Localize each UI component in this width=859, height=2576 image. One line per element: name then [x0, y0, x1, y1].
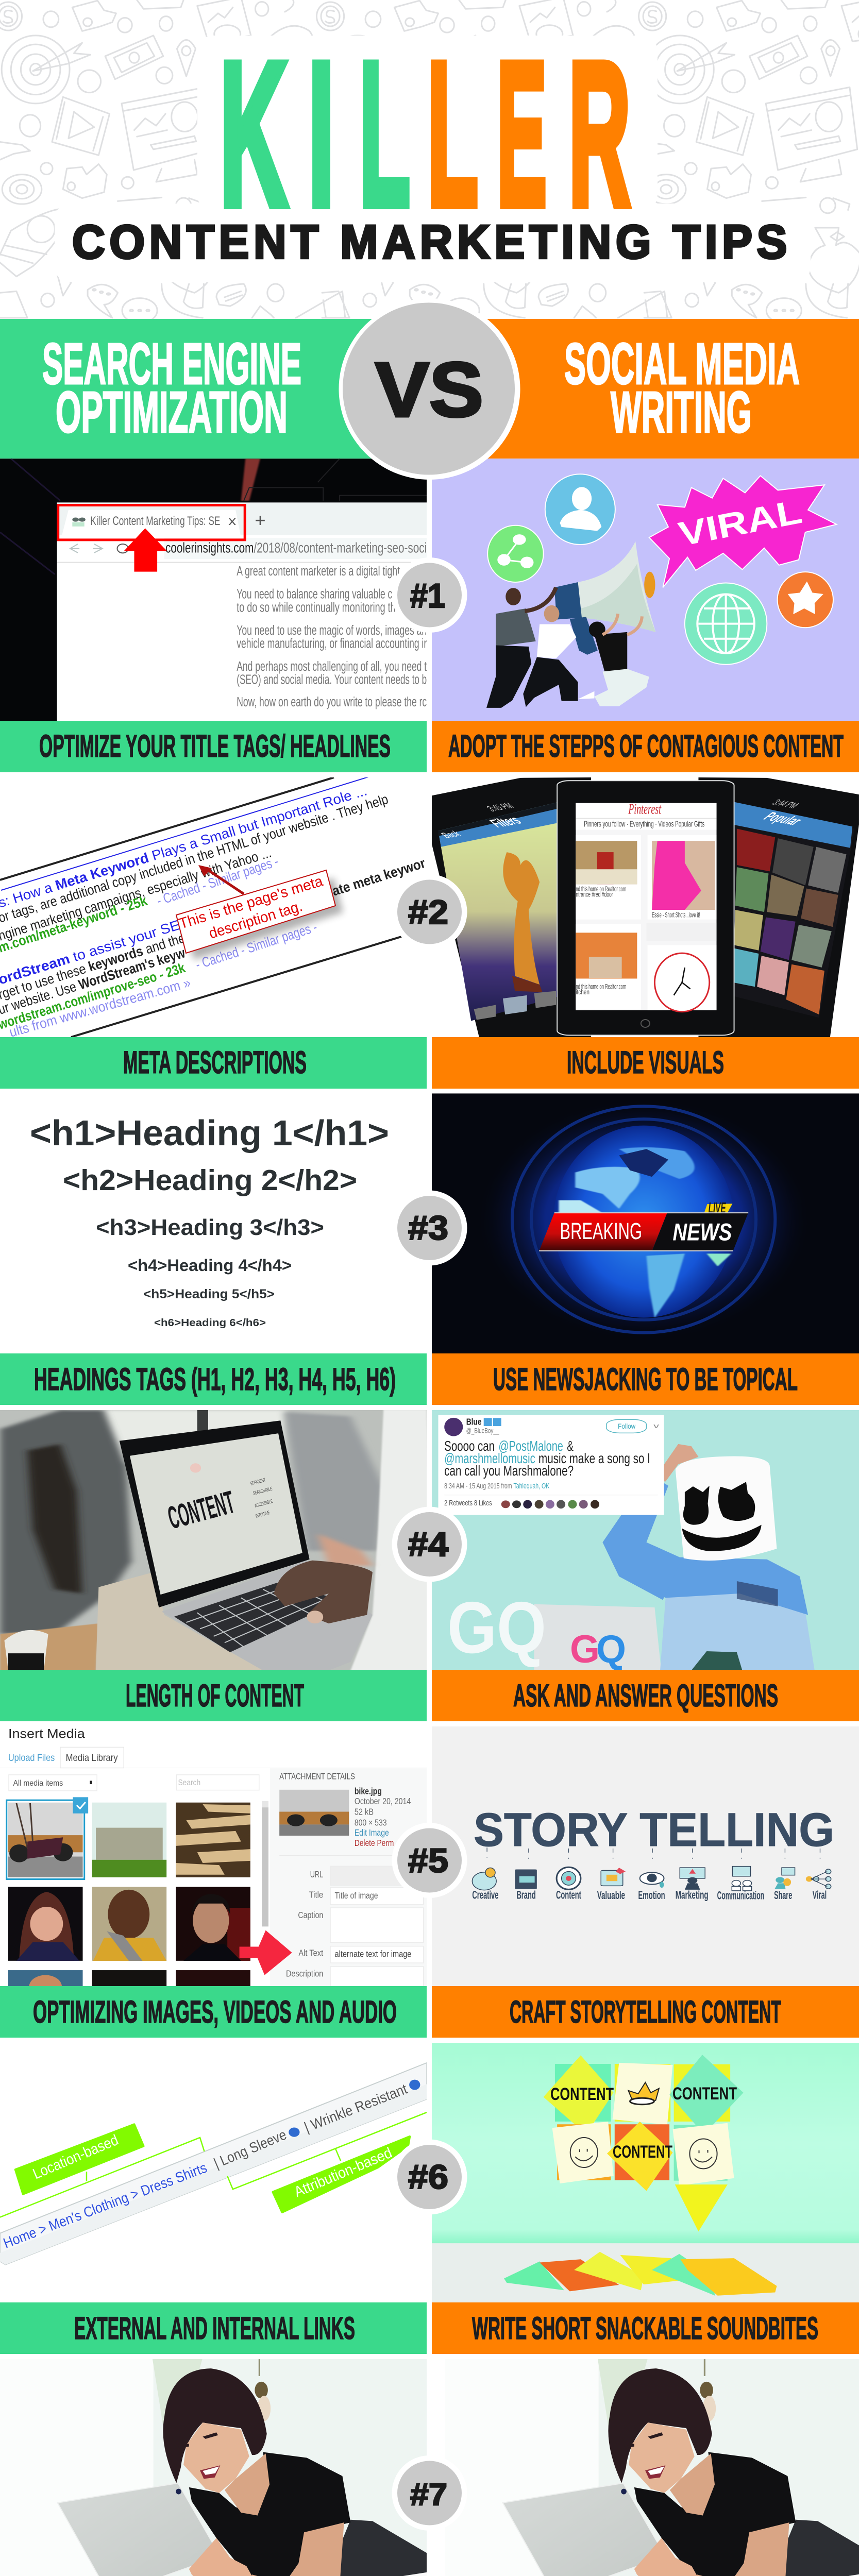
VS badge: VS: [375, 346, 483, 433]
attachment details: bike.jpg: [355, 1786, 382, 1797]
logo: colour GQ: [570, 1628, 626, 1671]
text: alternate text for image: [335, 1949, 411, 1959]
search result text: m.com/meta-keyword - 25k: [0, 893, 149, 956]
search result text: - Cached - Similar pages -: [155, 853, 280, 909]
panel: insert media alt text screenshot: Insert Media: [8, 1726, 85, 1741]
breadcrumb text: | Wrinkle Resistant: [302, 2081, 410, 2136]
caption: heading tags: [0, 1353, 427, 1405]
logo: colour GQ: Q: [596, 1628, 626, 1671]
badge #5: #5: [408, 1841, 448, 1879]
breadcrumb text: Home > Men's Clothing > Dress Shirts: [1, 2159, 209, 2251]
panel: heading tags sample: <h4>Heading 4</h4>: [128, 1256, 292, 1275]
panel: viral megaphone illustration: [432, 459, 859, 721]
header band: search engine optimization: OPTIMIZATION: [56, 380, 288, 445]
search result text: [0, 783, 428, 1040]
sticky wall: [544, 2055, 744, 2231]
panel: laptop content photo: EFFICIENT: [250, 1478, 266, 1487]
right tablet: [698, 777, 859, 1038]
note stacks: [504, 2252, 777, 2296]
sticky note text: [550, 2084, 737, 2162]
attachment details: 52 kB: [355, 1807, 374, 1817]
icon labels: Emotion: [638, 1889, 665, 1902]
caption: optimize title tags: [0, 721, 427, 772]
panel: sticky notes: [432, 2043, 859, 2303]
panel: browser tab screenshot: Killer Content Marketing Tips: SE: [90, 514, 220, 528]
search result text: - Cached - Similar pages -: [194, 919, 319, 973]
search result text: ngine marketing campaigns, especially with Yahoo ...: [0, 845, 273, 944]
panel: marshmello tweet photo: [432, 1410, 859, 1671]
badge #4: [392, 1506, 467, 1582]
text: You need to balance sharing valuable c: [237, 586, 392, 601]
icon labels: Creative: [472, 1889, 498, 1902]
caption: heading tags: HEADINGS TAGS (H1, H2, H3, H4, H5, H6): [34, 1362, 396, 1397]
logo: colour GQ: G: [570, 1628, 600, 1671]
caption: optimize title tags: OPTIMIZE YOUR TITLE TAGS/ HEADLINES: [39, 728, 391, 764]
marshmello figure: [602, 1444, 815, 1670]
caption: meta descriptions: [0, 1037, 427, 1089]
attachment details: URL: [310, 1870, 323, 1879]
attachment details: Title: [309, 1890, 323, 1900]
panel: tablets with visuals: [432, 777, 859, 1038]
panel: breaking news globe: NEWS: [672, 1218, 732, 1246]
panel: browser tab screenshot: +: [255, 510, 266, 531]
panel: laptop content photo: CONTENT: [164, 1484, 238, 1536]
badge #3: [392, 1190, 467, 1265]
left tablet: Filters: [486, 814, 525, 830]
text: October 20, 2014: [355, 1797, 411, 1806]
badge #2: [392, 874, 467, 950]
panel: insert media alt text screenshot: Search: [178, 1778, 200, 1787]
icon labels: Share: [774, 1889, 792, 1902]
sticky note text: CONTENT: [550, 2084, 614, 2104]
caption: length of content: LENGTH OF CONTENT: [126, 1678, 304, 1713]
caption: optimizing images: OPTIMIZING IMAGES, VIDEOS AND AUDIO: [33, 1994, 397, 2029]
header band: search engine optimization: SEARCH ENGINE: [42, 331, 301, 396]
panel: meta description search results: [0, 777, 428, 1040]
tweet card: 2 Retweets 8 Likes: [444, 1499, 492, 1507]
title: KILLER: L: [427, 20, 478, 248]
tweet card: Blue: [466, 1417, 481, 1427]
media thumbnails: [7, 1797, 250, 1998]
breadcrumb text: [1, 2081, 410, 2251]
tweet card: 8:34 AM - 15 Aug 2015 from Tahlequah, OK: [444, 1482, 550, 1490]
header band: social media writing: [429, 319, 859, 459]
caption: external and internal links: EXTERNAL AND INTERNAL LINKS: [74, 2311, 355, 2346]
tweet card: Follow: [618, 1422, 635, 1430]
attachment details: Edit Image: [355, 1828, 389, 1838]
panel: laptop content photo: SEARCHABLE: [252, 1486, 273, 1497]
text: to do so while continually monitoring th: [237, 600, 396, 615]
caption: newsjacking: [432, 1353, 859, 1405]
badge #6: [392, 2139, 467, 2214]
caption: length of content: [0, 1670, 427, 1721]
badge #1: #1: [410, 577, 445, 615]
tag labels: Attribution-based: [292, 2145, 395, 2200]
text: viral: VIRAL: [676, 492, 805, 553]
icon labels: Marketing: [676, 1889, 709, 1902]
tag labels: [30, 2132, 395, 2200]
breadcrumb bar: [0, 2063, 427, 2265]
badge #2: #2: [408, 893, 448, 931]
panel: breadcrumb links: [0, 2043, 427, 2302]
caption: ask and answer: [432, 1670, 859, 1721]
attachment details: Delete Perm: [355, 1838, 394, 1848]
tweet card: @_BlueBoy__: [466, 1427, 499, 1434]
panel: laptop content photo: [0, 1410, 433, 1670]
panel: heading tags sample: <h3>Heading 3</h3>: [96, 1215, 324, 1240]
caption: meta descriptions: META DESCRIPTIONS: [123, 1045, 307, 1080]
logo: white GQ: GQ: [447, 1587, 546, 1669]
banner: breaking news: [539, 1199, 748, 1251]
icon: viral burst: [649, 476, 836, 587]
center tablet: [557, 781, 734, 1035]
panel: insert media alt text screenshot: All media items: [13, 1778, 63, 1788]
caption: adopt stepps: [432, 721, 859, 772]
subtitle: CONTENT MARKETING TIPS: [72, 216, 791, 268]
connector lines: [0, 2112, 427, 2217]
caption: external and internal links: [0, 2302, 427, 2354]
laptop and GQ: [534, 1604, 661, 1670]
center tablet: Pinterest: [628, 801, 662, 817]
search result text: rget to use these keywords and the: [0, 930, 187, 1003]
panel: heading tags sample: [30, 1113, 389, 1329]
attachment details: Caption: [298, 1910, 323, 1920]
badge #1: [392, 557, 467, 633]
badge #3: #3: [408, 1209, 448, 1247]
attachment details: [270, 1768, 427, 1987]
text: coolerinsights.com/2018/08/content-marketing-seo-soci: [165, 539, 427, 555]
left tablet: [432, 777, 591, 1038]
tweet card: &: [567, 1437, 574, 1454]
search result text: ults from www.wordstream.com »: [8, 975, 192, 1040]
icon: user bubble: [545, 474, 615, 545]
text: A great content marketer is a digital tight: [237, 564, 400, 579]
icon: share bubble: [487, 526, 544, 582]
right tablet: 3:44 PM: [769, 798, 802, 810]
VS badge: [339, 298, 520, 480]
header band: search engine optimization: [0, 319, 429, 459]
icon: globe bubble: [685, 583, 767, 665]
attachment details: ATTACHMENT DETAILS: [279, 1772, 355, 1781]
illustration: three people: [486, 587, 649, 708]
search result text: wordstream.com/improve-seo - 23k: [0, 960, 188, 1032]
badge #4: #4: [408, 1525, 448, 1563]
panel: heading tags sample: <h2>Heading 2</h2>: [63, 1164, 357, 1197]
dashed connectors: [487, 1848, 820, 1859]
text: Now, how on earth do you write to please the rc: [237, 694, 427, 709]
caption: optimizing images: [0, 1986, 427, 2038]
icon row: [472, 1867, 831, 1891]
tweet card: Soooo can: [444, 1437, 495, 1454]
panel: insert media alt text screenshot: Upload Files: [8, 1752, 55, 1763]
badge #7: #7: [410, 2477, 447, 2512]
caption: include visuals: [432, 1037, 859, 1089]
text: (SEO) and social media. Your content needs to b: [237, 672, 427, 687]
heading: STORY TELLING: STORY TELLING: [474, 1804, 834, 1856]
sticky note text: CONTENT: [672, 2084, 737, 2104]
panel: breaking news globe: LIVE: [709, 1199, 726, 1216]
panel: browser tab screenshot: x: [228, 514, 237, 528]
tweet card: v: [653, 1422, 660, 1430]
panel: woman with tablet, right: [445, 2358, 859, 2576]
title backdrop: [55, 36, 811, 282]
background doodle pattern: [0, 0, 859, 323]
text: You need to use the magic of words, images an: [237, 623, 427, 638]
panel: storytelling graphic: [432, 1726, 859, 1986]
title: KILLER: I: [308, 20, 334, 248]
panel: heading tags sample: <h6>Heading 6</h6>: [154, 1317, 266, 1329]
panel: insert media alt text screenshot: [0, 1721, 427, 1998]
title: KILLER: [220, 20, 631, 248]
attachment details: Alt Text: [298, 1948, 323, 1958]
callout: meta description tag: [176, 865, 343, 960]
badge #7: [392, 2455, 467, 2531]
tweet card: [438, 1415, 664, 1515]
left tablet: Back: [439, 829, 464, 840]
icon: star bubble: [778, 572, 833, 628]
illustration: megaphone: [554, 541, 656, 655]
arrow: alt text pointer: [240, 1930, 292, 1975]
search result text: ur website. Use WordStream's keyw: [0, 945, 188, 1018]
panel: laptop content photo: INTUITIVE: [255, 1510, 271, 1519]
title: KILLER: E: [497, 20, 547, 248]
panel: breaking news globe: [432, 1093, 859, 1354]
breadcrumb text: | Long Sleeve: [211, 2126, 289, 2172]
center tablet: nd this home on Realtor.com: [576, 885, 626, 893]
icon labels: Content: [556, 1889, 581, 1902]
search result text: s: How a Meta Keyword Plays a Small but Important Role ...: [0, 783, 369, 911]
title: KILLER: L: [359, 20, 410, 248]
search result text: or tags, are additional copy included in the HTML of your website . They help: [0, 791, 390, 926]
panel: heading tags sample: <h1>Heading 1</h1>: [30, 1113, 389, 1153]
badge #6: #6: [408, 2158, 448, 2196]
center tablet: ntrance #red #door: [576, 890, 613, 898]
icon labels: Brand: [517, 1889, 536, 1902]
text: R: [569, 20, 631, 248]
caption: craft storytelling: [432, 1986, 859, 2038]
title: KILLER: K: [220, 20, 288, 248]
attachment details: 800 × 533: [355, 1818, 387, 1828]
icon labels: Valuable: [597, 1889, 625, 1902]
header band: social media writing: WRITING: [611, 380, 752, 445]
tag: attribution-based: [273, 2137, 410, 2212]
caption: include visuals: INCLUDE VISUALS: [567, 1045, 724, 1080]
callout: meta description tag: description tag.: [207, 898, 305, 942]
panel: laptop content photo: ACCESSIBLE: [254, 1499, 274, 1509]
tag: location-based: [15, 2124, 144, 2194]
tweet card: @marshmellomusic: [444, 1450, 535, 1466]
badge #5: [392, 1823, 467, 1898]
text: And perhaps most challenging of all, you need t: [237, 659, 427, 673]
search result text: ordStream to assist your SE: [0, 917, 182, 988]
tweet card: @PostMalone: [498, 1437, 563, 1454]
panel: woman with tablet, left: [0, 2358, 430, 2576]
left tablet: 3:45 PM: [484, 801, 516, 814]
caption: short snackable soundbites: [432, 2302, 859, 2354]
panel: browser tab screenshot: [0, 459, 427, 721]
center tablet: itchen: [576, 988, 589, 996]
attachment details: Description: [286, 1969, 323, 1979]
sticky note text: CONTENT: [613, 2142, 672, 2162]
icon labels: [472, 1889, 827, 1902]
panel: heading tags sample: <h5>Heading 5</h5>: [143, 1287, 275, 1301]
panel: insert media alt text screenshot: Media Library: [66, 1752, 118, 1763]
tag labels: Location-based: [30, 2132, 121, 2182]
center tablet: nd this home on Realtor.com: [576, 982, 626, 990]
text: vehicle manufacturing, or financial accounting ir: [237, 636, 427, 651]
attachment details: Title of image: [335, 1890, 378, 1901]
search result text: ate meta keywor: [330, 855, 428, 899]
callout: meta description tag: This is the page's meta: [177, 873, 325, 933]
